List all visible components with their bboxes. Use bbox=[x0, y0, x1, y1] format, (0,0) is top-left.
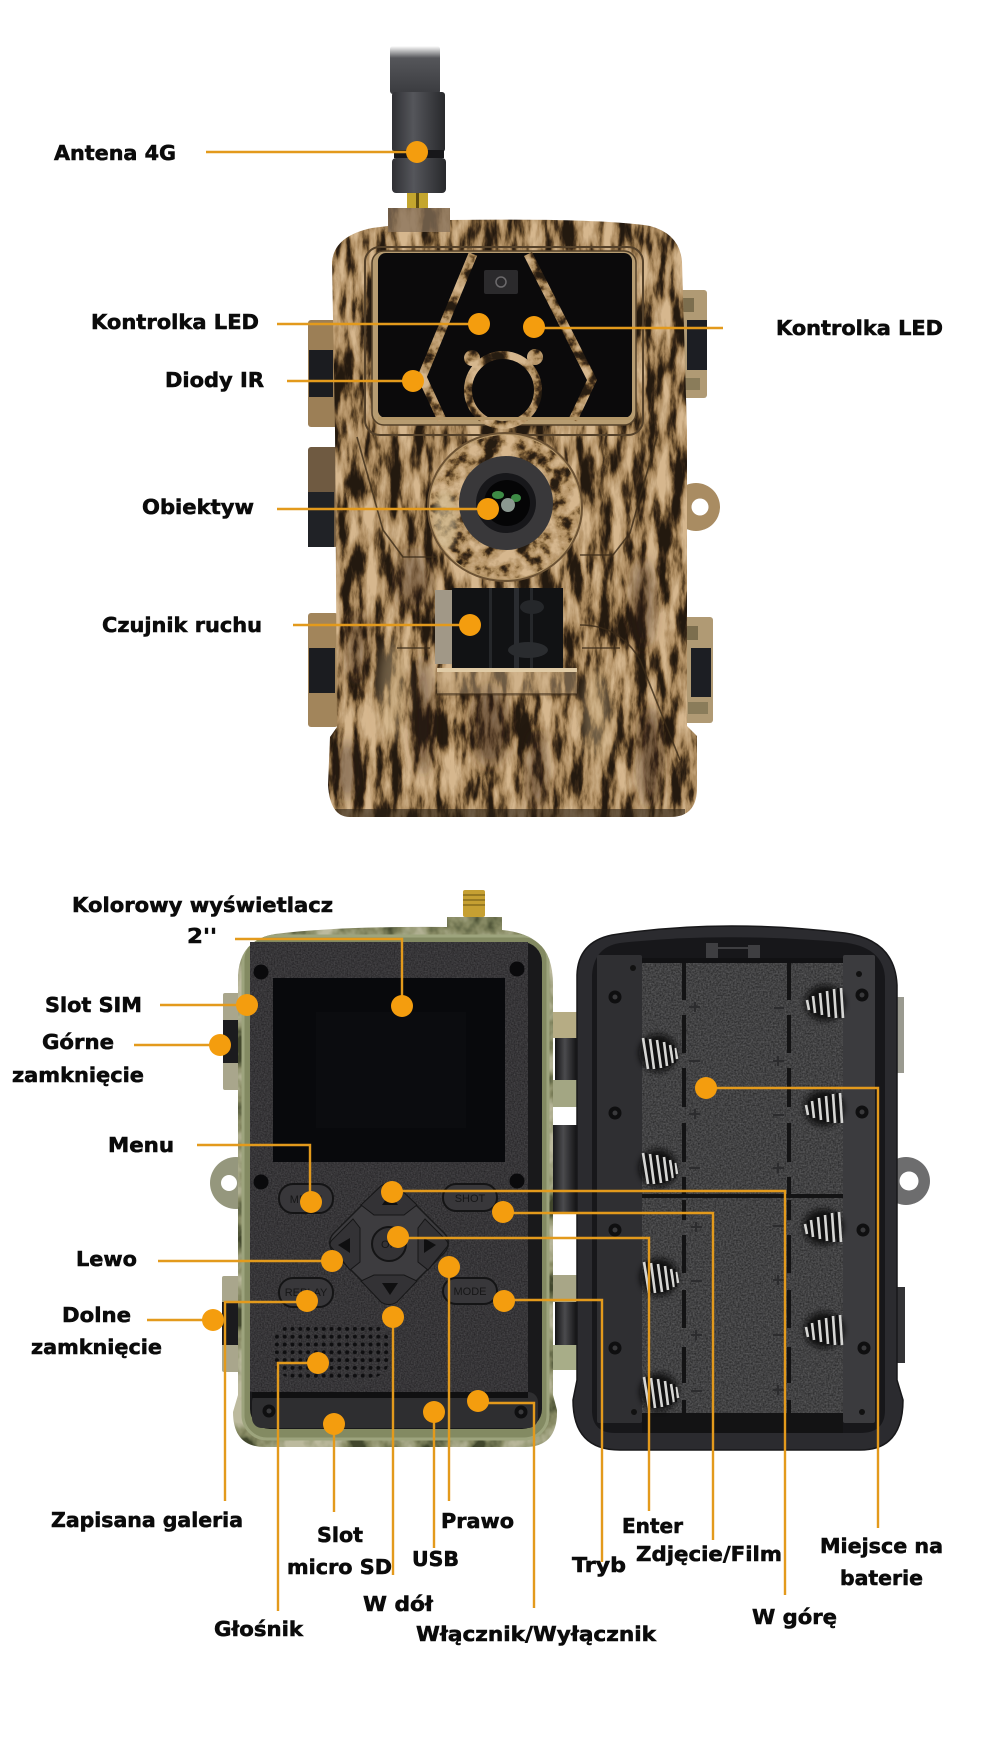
SHOT button: SHOT bbox=[455, 1193, 486, 1205]
callout: Slot micro SD: Slot bbox=[317, 1523, 363, 1547]
dark infrared window bbox=[378, 253, 632, 418]
directional pad bbox=[324, 1178, 454, 1308]
antenna bbox=[390, 46, 446, 208]
polarity marks bbox=[689, 1002, 784, 1395]
case screws bbox=[608, 965, 870, 1415]
window frame bbox=[360, 240, 650, 440]
case flanges and ear bbox=[882, 997, 930, 1363]
REPLAY button bbox=[279, 1278, 333, 1307]
back view: camera door and battery case bbox=[210, 890, 930, 1452]
panel corner holes bbox=[254, 964, 268, 980]
callout: Czujnik ruchu: Czujnik ruchu bbox=[102, 613, 262, 637]
callout: W górę: W górę bbox=[752, 1605, 837, 1629]
motion sensor bbox=[435, 588, 577, 696]
callout: Dolne zamknięcie bbox=[31, 1303, 224, 1359]
callout: Zdjęcie/Film bbox=[492, 1201, 782, 1566]
battery case bbox=[573, 926, 930, 1450]
cell separators bbox=[642, 958, 843, 1433]
callout: Lewo: Lewo bbox=[76, 1247, 137, 1271]
side bars bbox=[597, 955, 642, 1423]
body embossed lines bbox=[357, 437, 680, 760]
MENU button: MENU bbox=[290, 1194, 322, 1206]
front view of the camera bbox=[308, 46, 720, 830]
callout: Slot SIM: Slot SIM bbox=[45, 993, 142, 1017]
callout: Diody IR bbox=[165, 368, 424, 392]
battery floor bbox=[642, 963, 843, 1413]
top latch bbox=[706, 943, 760, 958]
callout: Prawo: Prawo bbox=[441, 1509, 514, 1533]
callout: Miejsce na baterie: baterie bbox=[840, 1566, 923, 1590]
springs bbox=[639, 985, 845, 1411]
callout: Kolorowy wyświetlacz 2'': 2'' bbox=[187, 924, 217, 948]
lens housing bbox=[428, 433, 582, 581]
callout: W dół: W dół bbox=[363, 1592, 434, 1616]
callout: USB: USB bbox=[412, 1547, 459, 1571]
callout: Dolne zamknięcie: Dolne bbox=[62, 1303, 131, 1327]
callout: Włącznik/Wyłącznik: Włącznik/Wyłącznik bbox=[416, 1622, 657, 1646]
callout: USB bbox=[412, 1401, 459, 1571]
callout: Kontrolka LED right: Kontrolka LED bbox=[776, 316, 943, 340]
callout: Kolorowy wyświetlacz 2'' bbox=[72, 893, 413, 1017]
callout: Górne zamknięcie: Górne bbox=[42, 1030, 114, 1054]
callout: Miejsce na baterie: Miejsce na bbox=[820, 1534, 943, 1558]
callout: Lewo bbox=[76, 1247, 343, 1272]
callout: W górę bbox=[381, 1181, 837, 1629]
small sensor bbox=[484, 270, 518, 294]
callout: Górne zamknięcie bbox=[12, 1030, 231, 1087]
SMA connector bbox=[463, 890, 485, 917]
callout: Obiektyw: Obiektyw bbox=[142, 495, 254, 519]
callout: Tryb: Tryb bbox=[572, 1553, 626, 1577]
REPLAY button: REPLAY bbox=[285, 1287, 328, 1299]
IR diode dividers bbox=[419, 252, 597, 429]
right mounting ear bbox=[672, 483, 720, 531]
callout: Slot micro SD: micro SD bbox=[287, 1555, 392, 1579]
lower strip with screws bbox=[252, 1392, 538, 1428]
right clips bbox=[675, 290, 713, 723]
callout: Enter bbox=[387, 1226, 683, 1538]
door clips bbox=[222, 993, 243, 1372]
left mounting ear bbox=[210, 1157, 262, 1209]
callout: Kolorowy wyświetlacz 2'': Kolorowy wyświetlacz bbox=[72, 893, 333, 917]
callout: Zapisana galeria bbox=[51, 1290, 318, 1532]
callout: Slot micro SD bbox=[287, 1413, 392, 1579]
callout: Antena 4G bbox=[54, 141, 428, 165]
callout: Kontrolka LED left bbox=[91, 310, 490, 335]
MENU button bbox=[279, 1184, 333, 1213]
left clips bbox=[308, 320, 338, 727]
control panel bbox=[250, 942, 538, 1428]
callout: Antena 4G: Antena 4G bbox=[54, 141, 176, 165]
callout: Slot SIM bbox=[45, 993, 258, 1017]
camouflage body bbox=[320, 200, 710, 830]
callout: Dolne zamknięcie: zamknięcie bbox=[31, 1335, 162, 1359]
callout: Czujnik ruchu bbox=[102, 613, 481, 637]
callout: Menu: Menu bbox=[108, 1133, 174, 1157]
directional pad: OK bbox=[381, 1239, 398, 1251]
callout: Kontrolka LED right bbox=[523, 316, 943, 340]
callout: Zapisana galeria: Zapisana galeria bbox=[51, 1508, 243, 1532]
hinges bbox=[552, 1012, 578, 1370]
SHOT button bbox=[443, 1184, 497, 1211]
callout: Włącznik/Wyłącznik bbox=[416, 1390, 657, 1646]
callout: Górne zamknięcie: zamknięcie bbox=[12, 1063, 144, 1087]
LCD screen bbox=[273, 978, 505, 1162]
callout: Enter: Enter bbox=[622, 1514, 683, 1538]
lens bbox=[459, 456, 553, 550]
callout: Zdjęcie/Film: Zdjęcie/Film bbox=[636, 1542, 782, 1566]
door body bbox=[228, 912, 563, 1452]
callout: Miejsce na baterie bbox=[695, 1077, 943, 1590]
callout: Tryb bbox=[493, 1290, 626, 1577]
MODE button: MODE bbox=[454, 1286, 486, 1298]
callout: Menu bbox=[108, 1133, 322, 1213]
callout: Diody IR: Diody IR bbox=[165, 368, 264, 392]
callout: Prawo bbox=[438, 1256, 514, 1533]
speaker grille bbox=[273, 1325, 390, 1378]
callout: Obiektyw bbox=[142, 495, 499, 520]
callout: Głośnik bbox=[214, 1352, 329, 1641]
callout: Kontrolka LED left: Kontrolka LED bbox=[91, 310, 259, 334]
MODE button bbox=[443, 1278, 497, 1304]
callout: Głośnik: Głośnik bbox=[214, 1617, 304, 1641]
callout: W dół bbox=[363, 1306, 434, 1616]
